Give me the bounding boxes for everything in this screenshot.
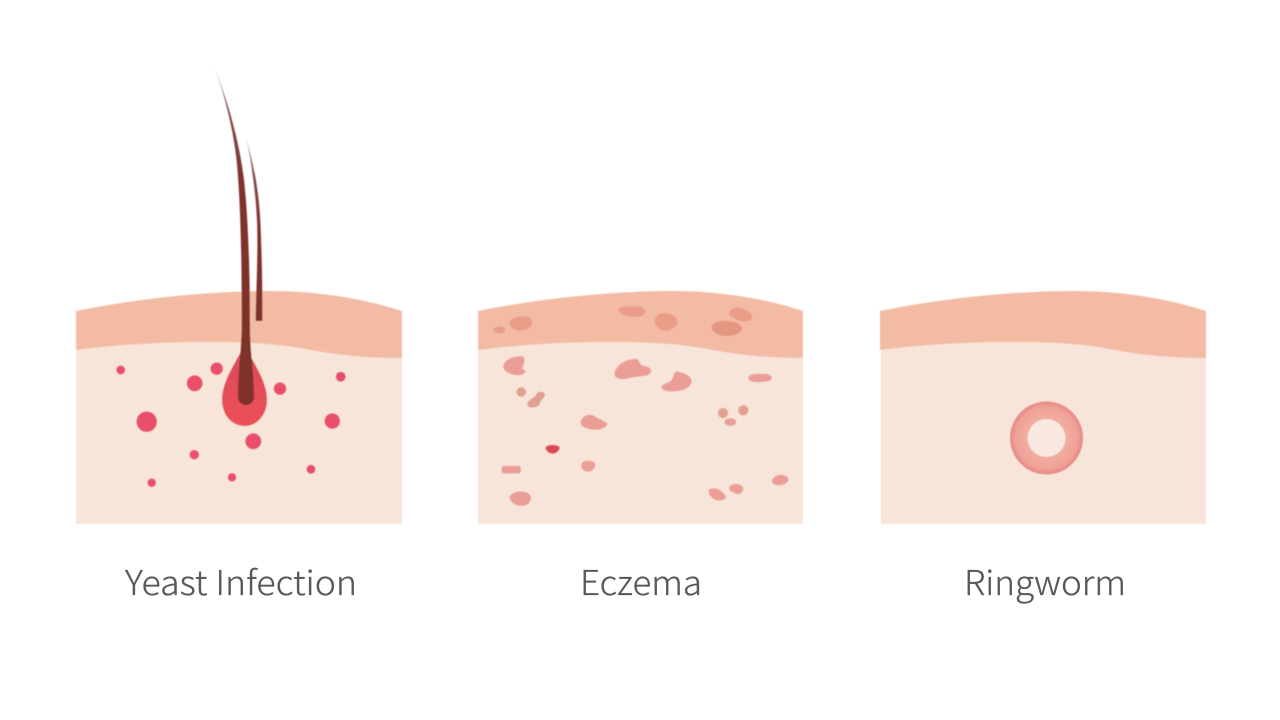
skin: dermis bbox=[478, 338, 803, 524]
skin: dermis bbox=[881, 338, 1206, 524]
hair: second shaft bbox=[246, 138, 262, 321]
red spot bbox=[545, 445, 560, 454]
skin: dermis bbox=[76, 338, 402, 524]
hair: main shaft bbox=[214, 67, 254, 405]
panel: ringworm bbox=[880, 291, 1206, 524]
label: eczema: Eczema bbox=[580, 556, 702, 605]
panel: eczema bbox=[478, 291, 803, 524]
skin: epidermis band bbox=[76, 291, 402, 358]
infection spots bbox=[116, 362, 346, 487]
skin: epidermis band bbox=[880, 291, 1206, 358]
label: ringworm: Ringworm bbox=[964, 556, 1126, 605]
label: yeast infection: Yeast Infection bbox=[125, 556, 357, 605]
follicle bulb bbox=[222, 343, 267, 426]
eczema patches bbox=[494, 307, 787, 505]
ringworm lesion bbox=[1010, 402, 1083, 474]
panel: yeast infection bbox=[76, 67, 402, 524]
skin: epidermis band bbox=[478, 291, 803, 358]
